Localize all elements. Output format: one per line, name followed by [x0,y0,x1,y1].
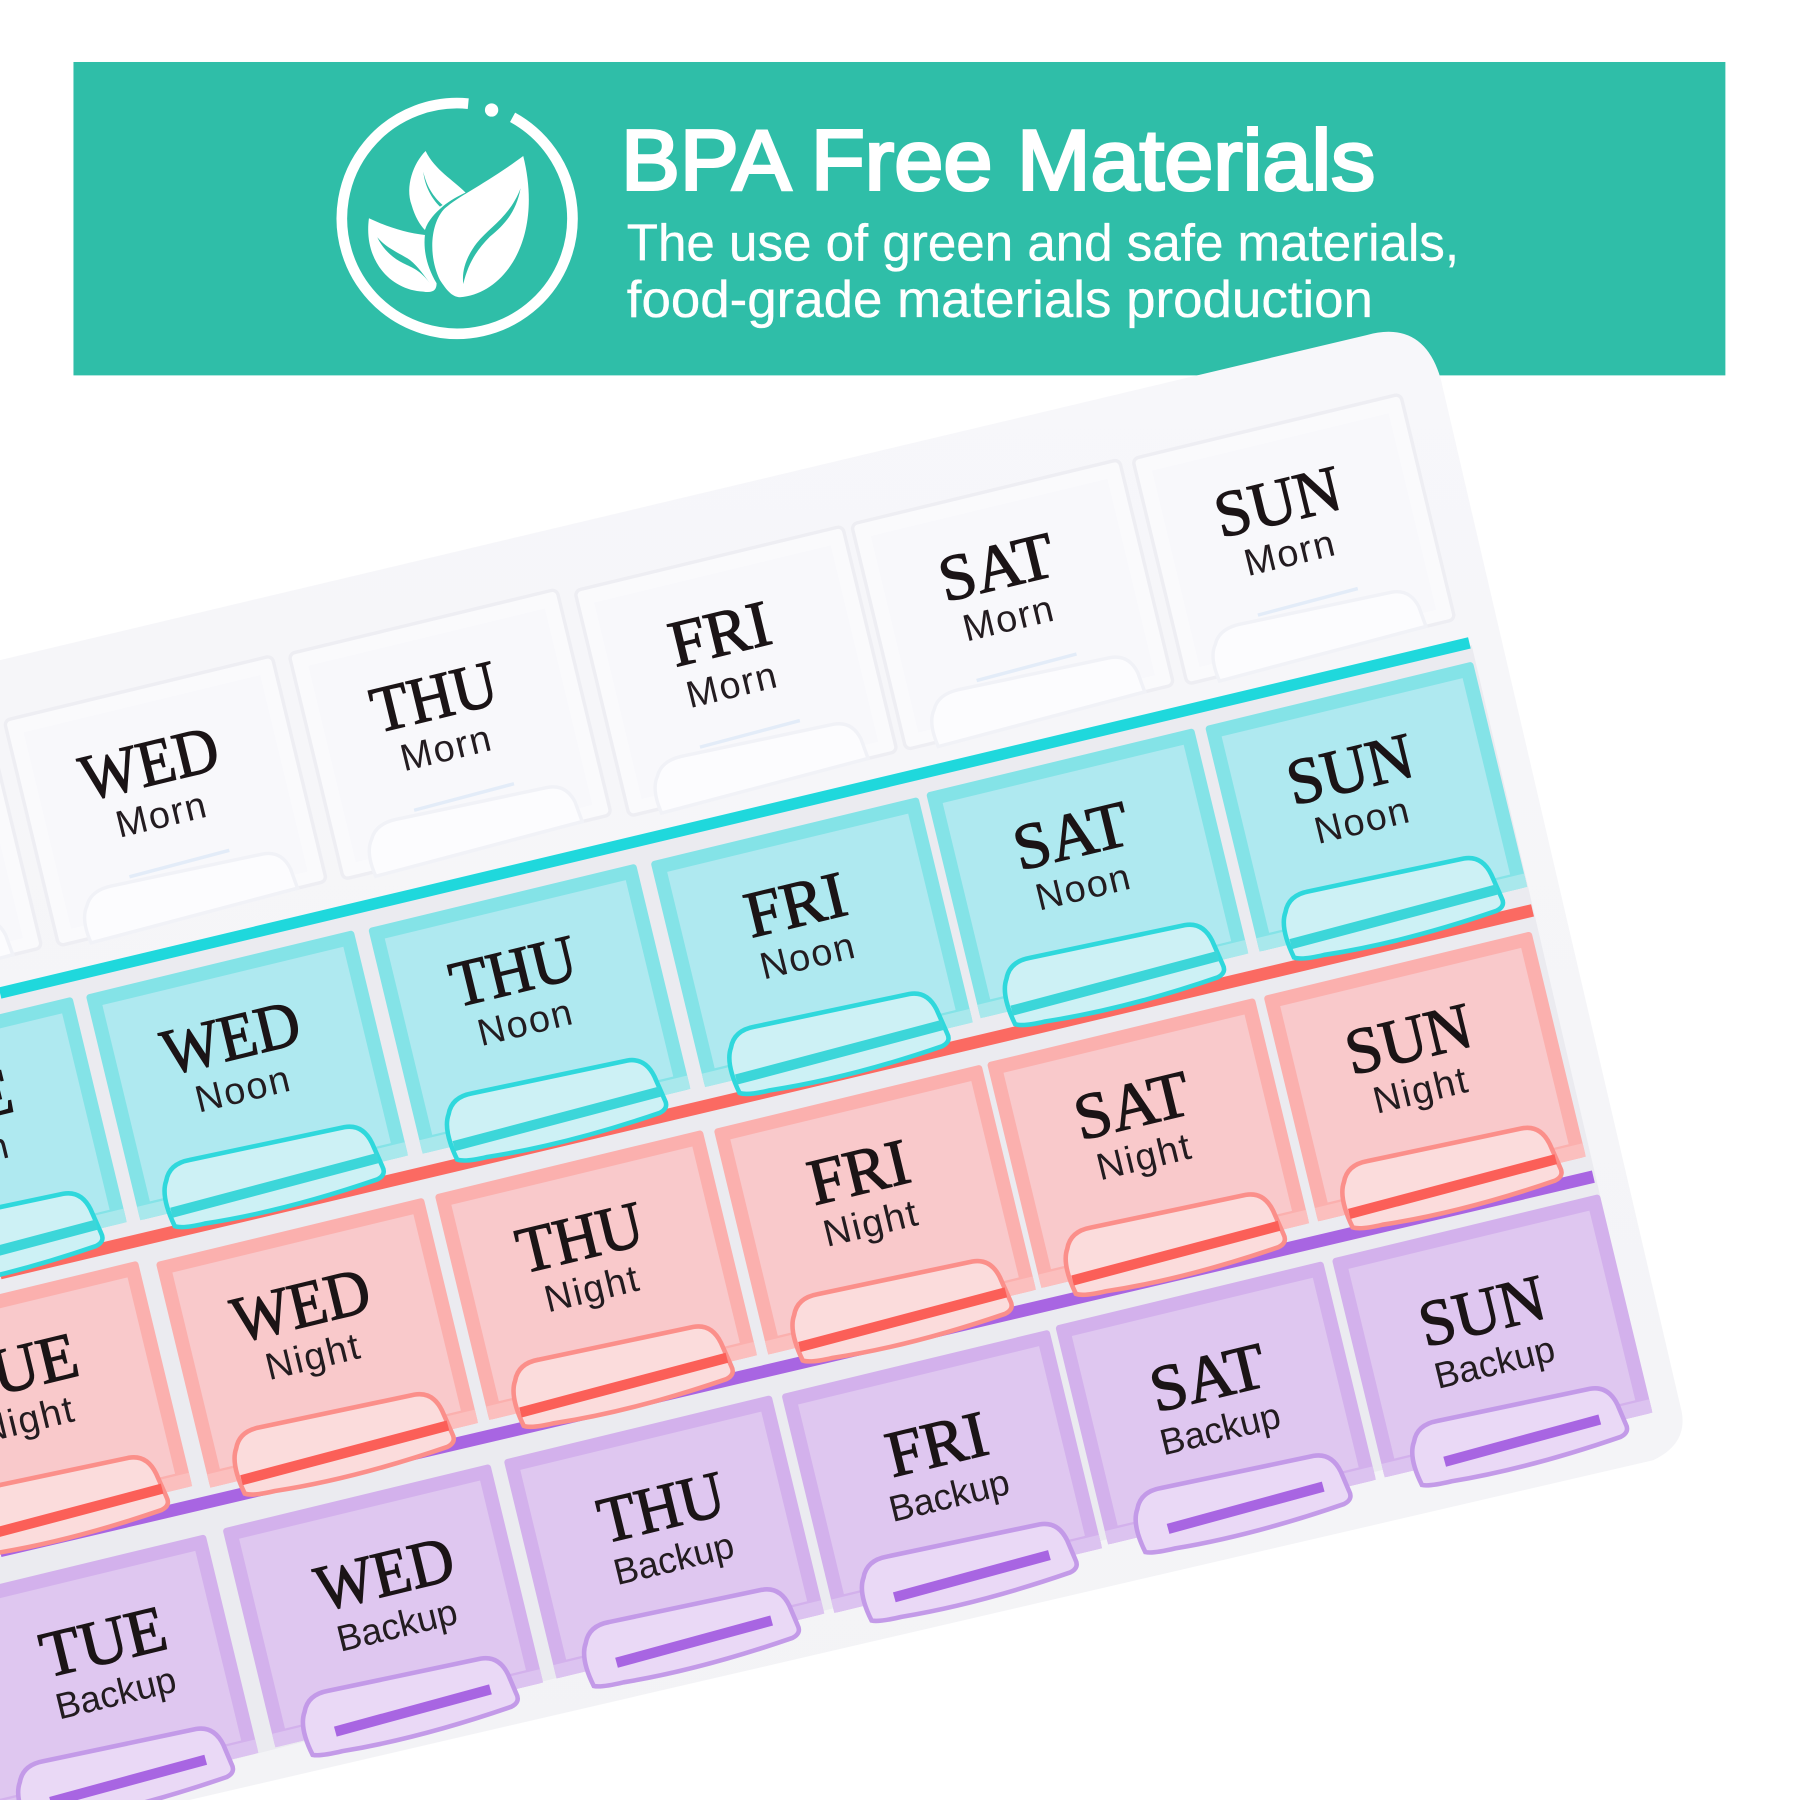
lid: Saturday morning [851,459,1173,696]
lid: Sunday backup: Backup [1430,1328,1559,1397]
night row [0,931,1591,1572]
coloured rows backing [0,645,1648,1800]
lid: Wednesday noon [86,930,413,1241]
backup row [0,1194,1658,1800]
lid: Tuesday backup [0,1534,263,1800]
banner text [627,214,1459,328]
banner text: The use of green and safe materials, [627,214,1459,272]
lid: Wednesday night: WED [224,1255,377,1357]
lid: Saturday backup: Backup [1156,1395,1284,1463]
lid: Wednesday backup: Backup [333,1591,461,1660]
lid: Friday morning: Morn [682,654,783,717]
lid: Friday backup: Backup [885,1461,1014,1530]
lid: Friday noon: FRI [738,858,854,952]
lid: Tuesday backup: TUE [33,1592,174,1692]
lid: Thursday night [435,1130,762,1441]
lid: Thursday noon: THU [443,922,584,1022]
lid: Sunday noon: Noon [1310,789,1415,853]
lid: Saturday morning: Morn [959,588,1059,650]
lid: Sunday backup [1332,1194,1658,1499]
lid: Wednesday morning [76,656,282,878]
lid: Sunday morning: SUN [1207,452,1348,552]
organizer base plate [0,332,1683,1800]
purple strip [0,1177,1593,1551]
lid: Tuesday noon [0,997,127,1277]
lid: Thursday night: THU [510,1188,650,1288]
lid: Thursday morning [288,589,584,812]
lid: Friday night: Night [819,1192,923,1256]
lid: Thursday backup: THU [591,1458,732,1558]
lid: Wednesday night: Night [261,1325,365,1389]
noon row [0,661,1532,1308]
lid: Thursday noon: Noon [473,991,578,1055]
lid: Friday backup: FRI [879,1398,995,1492]
lid: Thursday backup: Backup [609,1524,738,1593]
lid: Sunday night: Night [1369,1059,1473,1123]
lid: Friday morning: FRI [662,588,778,681]
lid: Thursday backup [504,1395,829,1700]
lid: Sunday noon [1205,661,1532,972]
lid: Friday night: FRI [801,1126,917,1220]
banner [73,62,1725,375]
lid: Sunday morning [1133,394,1456,689]
lid: Thursday noon [368,864,695,1174]
lid: Saturday noon: Noon [1031,856,1136,920]
lid: Wednesday morning: Morn [112,784,212,847]
lid: Tuesday morning [0,722,43,1017]
lid: Wednesday backup: WED [308,1523,461,1626]
lid: Sunday backup: SUN [1412,1262,1553,1362]
lid: Wednesday night [156,1198,483,1508]
lid: Friday backup [781,1330,1107,1634]
lid: Thursday morning: THU [364,648,505,748]
lid: Saturday night [987,998,1314,1309]
lid: Friday morning [574,526,882,748]
lid: Sunday night: SUN [1338,990,1479,1090]
lid: Tuesday night [0,1261,197,1572]
cyan strip [0,643,1469,993]
icon: leaves in ring [342,103,572,334]
lid: Thursday morning: Morn [396,717,497,780]
morning row [76,394,1455,878]
banner text: food-grade materials production [627,270,1373,328]
lid: Tuesday backup: Backup [51,1659,180,1727]
lid: Saturday backup [1055,1261,1381,1566]
lid: Saturday night: SAT [1067,1058,1197,1155]
banner heading: BPA Free Materials [621,112,1375,207]
lid: Saturday noon [926,728,1253,1039]
lid: Wednesday noon: Noon [191,1058,296,1122]
lid: Sunday night [1264,931,1591,1242]
lid: Thursday night: Night [540,1258,644,1321]
lid: Saturday morning: SAT [932,519,1062,617]
lid: Friday noon [651,797,978,1108]
lid: Wednesday noon: WED [154,987,307,1090]
lid: Sunday noon: SUN [1280,720,1421,820]
lid: Friday noon: Noon [756,925,860,988]
lid: Saturday noon: SAT [1006,788,1136,885]
lid: Wednesday morning: WED [73,713,226,816]
lid: Friday night [714,1064,1041,1375]
lid: Wednesday backup [222,1464,548,1768]
red strip [0,910,1533,1273]
pill organizer [0,332,1683,1800]
lid: Saturday night: Night [1092,1126,1197,1189]
lid: Saturday backup: SAT [1143,1330,1273,1427]
lid: Sunday morning: Morn [1240,522,1340,585]
